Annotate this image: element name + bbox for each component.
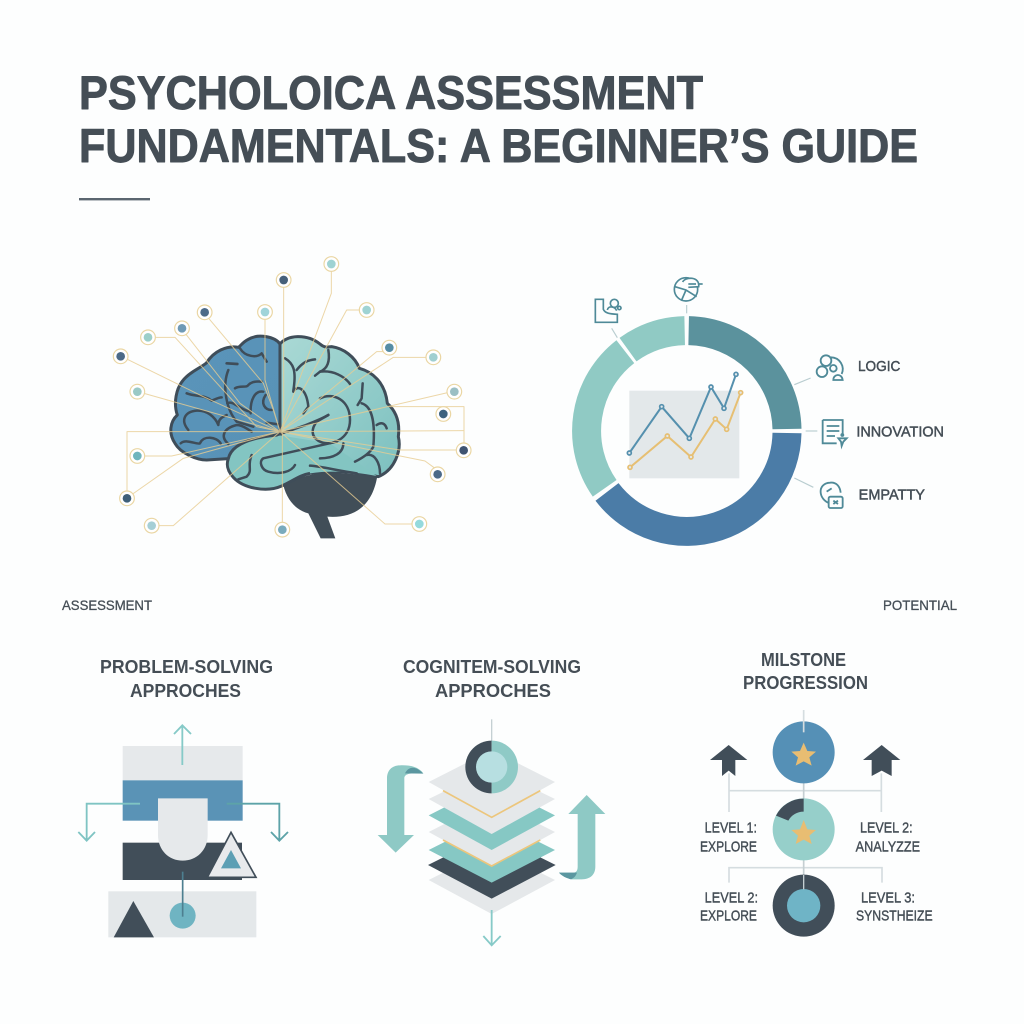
title: FUNDAMENTALS: A BEGINNER’S GUIDE [79, 119, 918, 172]
label: potential: POTENTIAL [883, 597, 957, 613]
layer stack [428, 750, 556, 914]
cognitive stacked layers diagram [378, 719, 605, 945]
arrow: curved down [378, 765, 423, 853]
text: level 3 synthesize [856, 890, 933, 925]
icon: empathy [821, 483, 843, 508]
text: level 2 explore: EXPLORE [700, 909, 757, 925]
dark block [123, 843, 242, 880]
title [79, 66, 918, 172]
icon: top left chart and head [595, 299, 621, 322]
title: PSYCHOLOICA ASSESSMENT [79, 66, 703, 119]
heading: cognitem-solving: APPROCHES [435, 680, 551, 701]
line chart [627, 372, 743, 478]
icon: top head [674, 278, 703, 301]
arrow: right [227, 804, 288, 841]
donut segment: empathy [587, 352, 625, 488]
brain diagram [113, 257, 471, 538]
network nodes [113, 257, 471, 537]
donut chart panel [587, 278, 944, 531]
milestone circle: top [773, 710, 835, 783]
text: level 1 explore [700, 821, 757, 855]
milestone circle: middle [773, 798, 835, 860]
text: empathy: EMPATTY [859, 487, 925, 504]
arrow: dark right [863, 745, 900, 776]
text: level 2 explore [700, 890, 758, 925]
vertical line top [490, 719, 494, 742]
label: assessment: ASSESSMENT [62, 597, 152, 613]
bottom block with shapes [108, 872, 256, 937]
left hemisphere [171, 336, 280, 460]
heading: problem-solving: PROBLEM-SOLVING [100, 656, 273, 677]
text: innovation: INNOVATION [856, 423, 944, 440]
donut segment: top left [628, 331, 685, 350]
text: level 3 synthesize: LEVEL 3: [861, 890, 915, 906]
text: level 1 explore: EXPLORE [700, 839, 757, 855]
light shield shape [158, 798, 208, 861]
heading: milestone progression: MILSTONE [761, 649, 846, 670]
heading: problem-solving: APPROCHES [130, 680, 241, 701]
text: level 2 analyze: LEVEL 2: [860, 821, 913, 837]
ring on top [465, 741, 518, 793]
triangle badge [207, 832, 256, 877]
text: level 2 analyze: ANALYZZE [856, 839, 920, 855]
text: logic: LOGIC [858, 358, 900, 375]
leader lines [612, 305, 817, 487]
milestone circle: bottom [773, 875, 835, 937]
light top block [123, 746, 243, 780]
network lines [127, 271, 464, 526]
heading: problem-solving [100, 656, 273, 701]
text: level 1 explore: LEVEL 1: [705, 821, 757, 837]
heading: milestone progression [743, 649, 868, 693]
heading: cognitem-solving [403, 656, 581, 701]
arrow: curved up [559, 795, 605, 879]
heading: milestone progression: PROGRESSION [743, 672, 868, 693]
cerebellum and brain stem [283, 472, 377, 538]
text: level 2 explore: LEVEL 2: [705, 890, 758, 906]
donut segment: innovation [607, 433, 787, 531]
text: level 2 analyze [856, 821, 920, 855]
arrow: up [174, 725, 191, 765]
icon: logic [817, 355, 843, 380]
arrow: left [78, 804, 140, 841]
milestone progression diagram [700, 710, 933, 937]
temporal lobe [227, 435, 377, 489]
arrow: bottom [483, 910, 501, 945]
problem-solving diagram [78, 725, 288, 937]
icon: innovation [823, 420, 847, 446]
blue block [123, 780, 243, 821]
heading: cognitem-solving: COGNITEM-SOLVING [403, 656, 581, 677]
arrow: dark left [710, 745, 747, 776]
donut segment: logic [689, 331, 787, 429]
brain folds [181, 344, 387, 479]
title underline [79, 198, 150, 200]
right hemisphere [280, 337, 399, 480]
text: level 3 synthesize: SYNSTHEIZE [856, 909, 933, 925]
connector lines [729, 773, 882, 883]
